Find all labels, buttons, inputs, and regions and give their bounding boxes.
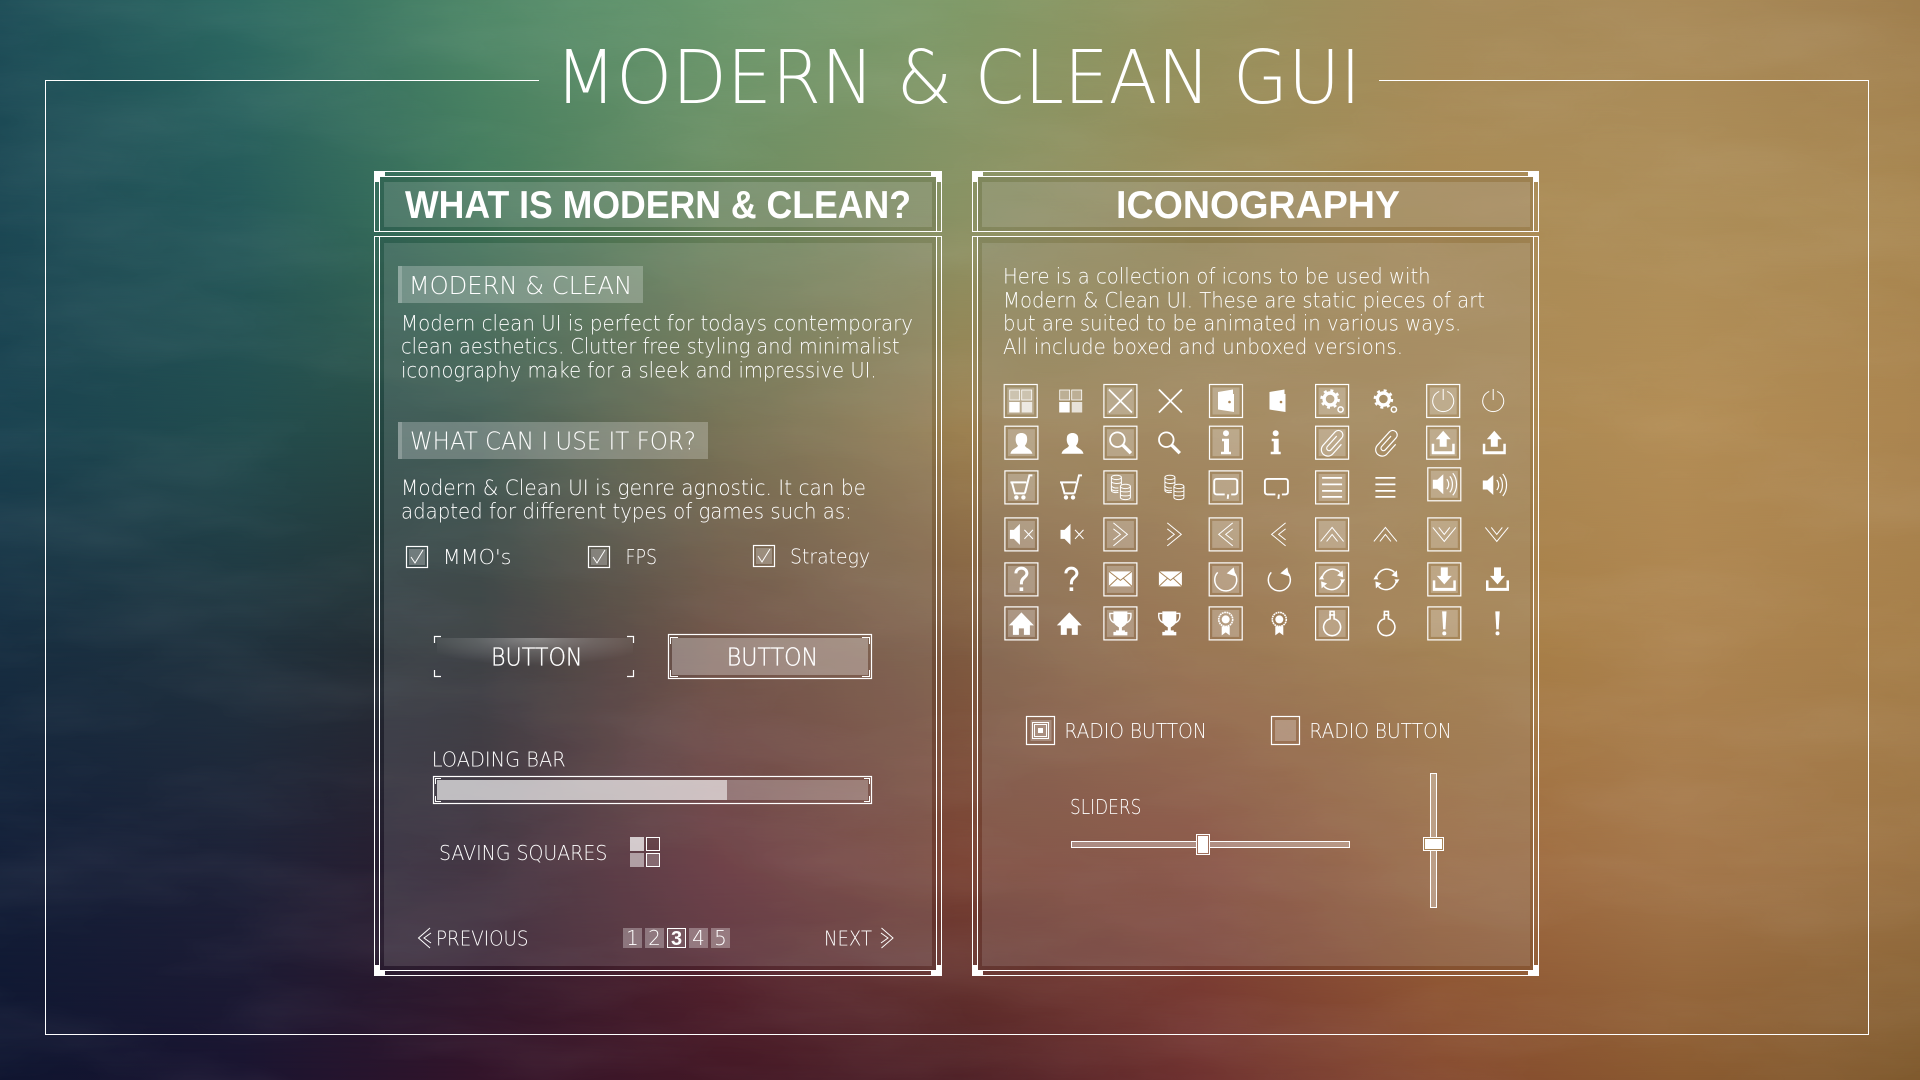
icon: paperclip boxed [1316, 426, 1349, 459]
icon: gear boxed [1316, 384, 1349, 418]
icon: search [1159, 432, 1180, 453]
icon: mail [1159, 571, 1182, 586]
previous link: PREVIOUS [436, 926, 528, 950]
icon: back [1272, 523, 1286, 546]
icon: flask boxed [1316, 607, 1349, 640]
icon: close boxed [1104, 384, 1137, 418]
icon: sync boxed [1316, 563, 1349, 596]
icon: up [1374, 527, 1397, 541]
icon: info boxed [1210, 426, 1242, 459]
pagination: 4 [692, 926, 705, 950]
pagination: 5 [714, 926, 727, 950]
icon: alert boxed [1428, 607, 1461, 640]
icon: chat boxed [1209, 471, 1242, 504]
pagination: 1 [626, 926, 639, 950]
icon: wallet boxed [1210, 384, 1242, 418]
radio button: selected [1026, 716, 1207, 744]
icon: home [1057, 612, 1082, 635]
icon: download [1486, 567, 1509, 591]
icon: download boxed [1428, 563, 1461, 596]
intro text: All include boxed and unboxed versions. [1003, 335, 1403, 360]
icon: upload boxed [1427, 426, 1460, 459]
icon: menu boxed [1316, 471, 1349, 504]
description text: Modern clean UI is perfect for todays contemporary [401, 312, 913, 337]
icon: back boxed [1209, 518, 1242, 551]
radio button: selected: RADIO BUTTON [1064, 719, 1207, 743]
icon: mute [1060, 524, 1084, 545]
panel fill [977, 176, 1534, 970]
icon: gear [1375, 390, 1396, 412]
icon: search boxed [1104, 426, 1137, 459]
icon: volume [1483, 474, 1507, 496]
icon: upload [1483, 431, 1506, 454]
button: hover [668, 634, 872, 678]
icon: coins [1165, 475, 1184, 500]
loading bar label: LOADING BAR [432, 748, 566, 772]
sliders label: SLIDERS [1070, 795, 1141, 819]
horizontal slider [1072, 834, 1350, 854]
panel: iconography [972, 171, 1539, 976]
checkbox: FPS [588, 545, 657, 569]
icon: volume boxed [1428, 468, 1461, 501]
icon: cart boxed [1005, 471, 1038, 504]
panel border [374, 171, 942, 976]
icon: medal boxed [1209, 607, 1242, 640]
icon: coins boxed [1104, 471, 1137, 504]
icon: grid boxed [1004, 384, 1037, 418]
icon: down [1485, 527, 1508, 541]
radio button: unselected: RADIO BUTTON [1309, 719, 1452, 743]
pagination: 2 [648, 926, 661, 950]
icon: trophy boxed [1104, 607, 1137, 640]
icon: info [1271, 430, 1281, 454]
loading bar [434, 776, 872, 804]
intro text: but are suited to be animated in various ways. [1003, 312, 1461, 337]
icon: sync [1373, 569, 1399, 590]
icon: power boxed [1427, 384, 1460, 418]
icon: power [1483, 389, 1504, 412]
icon: user [1062, 433, 1084, 454]
heading: iconography: ICONOGRAPHY [1116, 184, 1400, 227]
pagination [623, 926, 730, 950]
icon: forward [1167, 523, 1181, 546]
icon: mute boxed [1005, 518, 1038, 551]
button: default: BUTTON [491, 643, 582, 672]
description text [401, 312, 913, 383]
checkbox: MMOs: MMO's [443, 545, 512, 569]
icon: wallet [1270, 390, 1286, 412]
panel border [972, 171, 1539, 976]
saving squares [630, 837, 660, 867]
icon: close [1159, 390, 1182, 412]
icon: help boxed [1005, 563, 1038, 596]
icon: flask [1378, 611, 1395, 636]
usage text: Modern & Clean UI is genre agnostic. It can be [401, 476, 866, 501]
radio button: unselected [1272, 716, 1452, 744]
button: hover: BUTTON [727, 643, 818, 672]
vertical slider [1424, 774, 1444, 908]
intro text: Modern & Clean UI. These are static pieces of art [1003, 288, 1485, 313]
panel fill [379, 176, 937, 970]
pagination: 3 [671, 928, 682, 950]
icon: medal [1272, 612, 1286, 635]
heading: what is modern and clean: WHAT IS MODERN & CLEAN? [405, 184, 911, 227]
saving squares label: SAVING SQUARES [439, 841, 607, 865]
subheading: modern and clean: MODERN & CLEAN [409, 271, 632, 300]
title: MODERN & CLEAN GUI [555, 35, 1361, 121]
icon: down boxed [1428, 518, 1461, 551]
icon: menu [1375, 478, 1395, 497]
icon: chat [1265, 479, 1288, 499]
icon: up boxed [1316, 518, 1349, 551]
icon: user boxed [1005, 426, 1038, 459]
description text: iconography make for a sleek and impressive UI. [401, 358, 877, 383]
next link: NEXT [824, 926, 872, 950]
icon: grid [1059, 390, 1082, 412]
icon grid [1004, 384, 1509, 640]
button: default [434, 636, 634, 682]
intro text [1003, 264, 1485, 360]
icon: undo boxed [1209, 563, 1242, 596]
icon: trophy [1159, 611, 1180, 635]
icon: home boxed [1005, 607, 1038, 640]
icon: mail boxed [1104, 563, 1137, 596]
panel: what is modern and clean [374, 171, 942, 976]
description text: clean aesthetics. Clutter free styling and minimalist [401, 334, 900, 359]
icon: paperclip [1373, 429, 1402, 459]
subheading: what can i use it for: WHAT CAN I USE IT FOR? [410, 426, 696, 456]
checkbox: strategy [754, 544, 870, 568]
icon: undo [1268, 567, 1290, 591]
checkbox: MMOs [406, 545, 512, 569]
icon: help [1066, 568, 1077, 591]
checkbox: FPS: FPS [626, 545, 657, 569]
icon: forward boxed [1104, 518, 1137, 551]
icon: cart [1060, 475, 1082, 500]
icon: alert [1495, 611, 1500, 635]
usage text [401, 476, 866, 524]
checkbox: strategy: Strategy [790, 544, 870, 568]
usage text: adapted for different types of games such as: [401, 499, 852, 524]
intro text: Here is a collection of icons to be used with [1003, 264, 1431, 289]
